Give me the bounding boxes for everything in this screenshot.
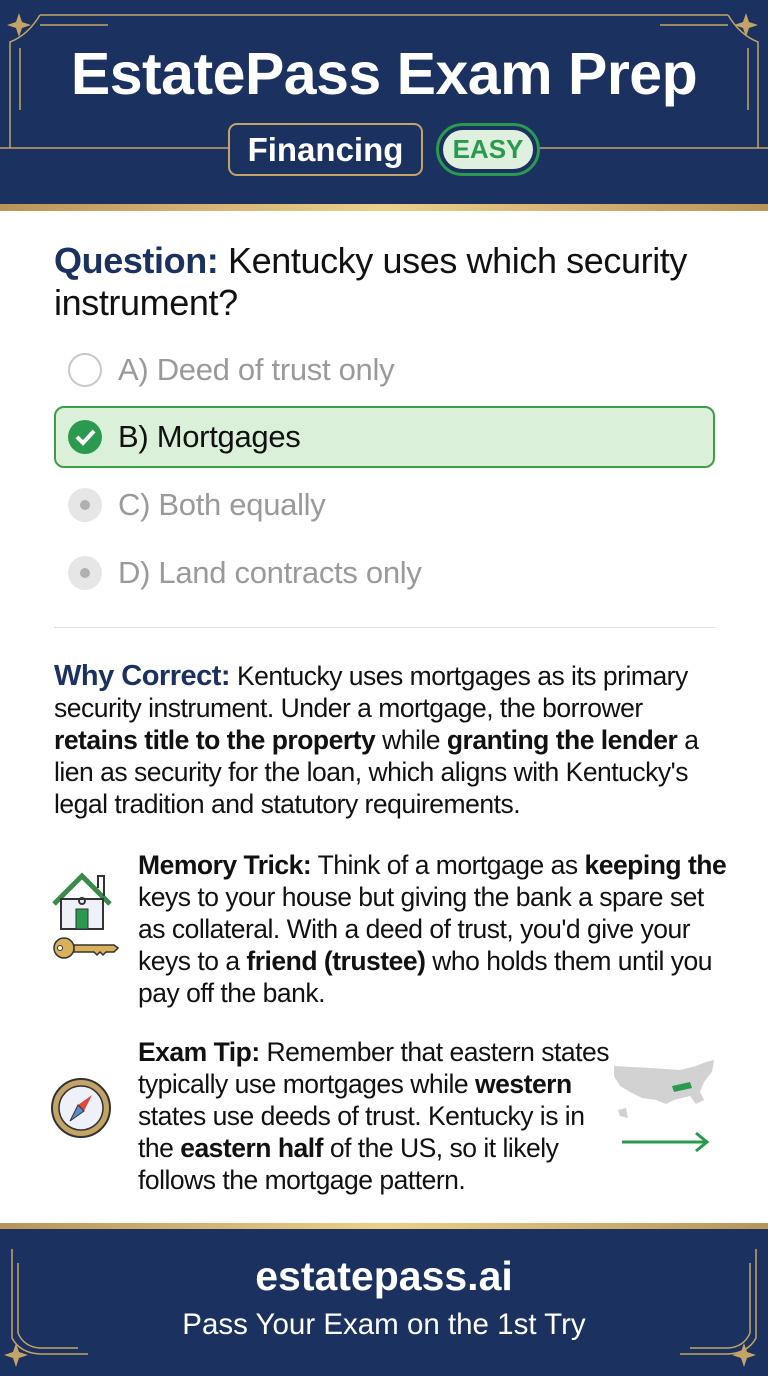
option B correct xyxy=(54,406,715,468)
badge: EASY xyxy=(436,123,540,176)
option D: D) Land contracts only xyxy=(118,555,422,590)
footer xyxy=(0,1223,768,1376)
memory trick xyxy=(138,850,726,1008)
why correct xyxy=(54,660,699,819)
footer site name: estatepass.ai xyxy=(255,1253,513,1299)
header xyxy=(0,0,768,211)
memory trick: keys to your house but giving the bank a spare set xyxy=(138,882,704,912)
icon: US map with arrow xyxy=(614,1060,714,1152)
exam tip: the eastern half of the US, so it likely xyxy=(138,1133,558,1163)
question: instrument? xyxy=(54,282,238,323)
badge: Financing: Financing xyxy=(248,131,403,168)
exam tip xyxy=(138,1037,609,1195)
exam tip: follows the mortgage pattern. xyxy=(138,1165,465,1195)
question: Question: Kentucky uses which security xyxy=(54,240,687,281)
title: EstatePass Exam Prep xyxy=(71,41,697,107)
option C: C) Both equally xyxy=(118,487,325,522)
memory trick: as collateral. With a deed of trust, you'd give your xyxy=(138,914,690,944)
option A: A) Deed of trust only xyxy=(118,352,394,387)
exam tip: typically use mortgages while western xyxy=(138,1069,572,1099)
badge: EASY: EASY xyxy=(453,134,523,164)
why correct: lien as security for the loan, which aligns with Kentucky's xyxy=(54,757,688,787)
exam tip: states use deeds of trust. Kentucky is in xyxy=(138,1101,584,1131)
icon: house and key xyxy=(52,872,120,959)
header frame ornament xyxy=(0,13,768,149)
why correct: security instrument. Under a mortgage, the borrower xyxy=(54,693,643,723)
memory trick: pay off the bank. xyxy=(138,978,325,1008)
memory trick: keys to a friend (trustee) who holds them until you xyxy=(138,946,712,976)
question xyxy=(54,240,688,323)
option B correct: B) Mortgages xyxy=(118,419,300,454)
badge: Financing xyxy=(228,123,423,176)
memory trick: Memory Trick: Think of a mortgage as keeping the xyxy=(138,850,726,880)
icon: compass xyxy=(51,1078,111,1138)
why correct: Why Correct: Kentucky uses mortgages as its primary xyxy=(54,660,688,692)
footer tagline: Pass Your Exam on the 1st Try xyxy=(182,1308,586,1341)
exam tip: Exam Tip: Remember that eastern states xyxy=(138,1037,609,1067)
why correct: retains title to the property while granting the lender a xyxy=(54,725,698,755)
why correct: legal tradition and statutory requirements. xyxy=(54,789,520,819)
